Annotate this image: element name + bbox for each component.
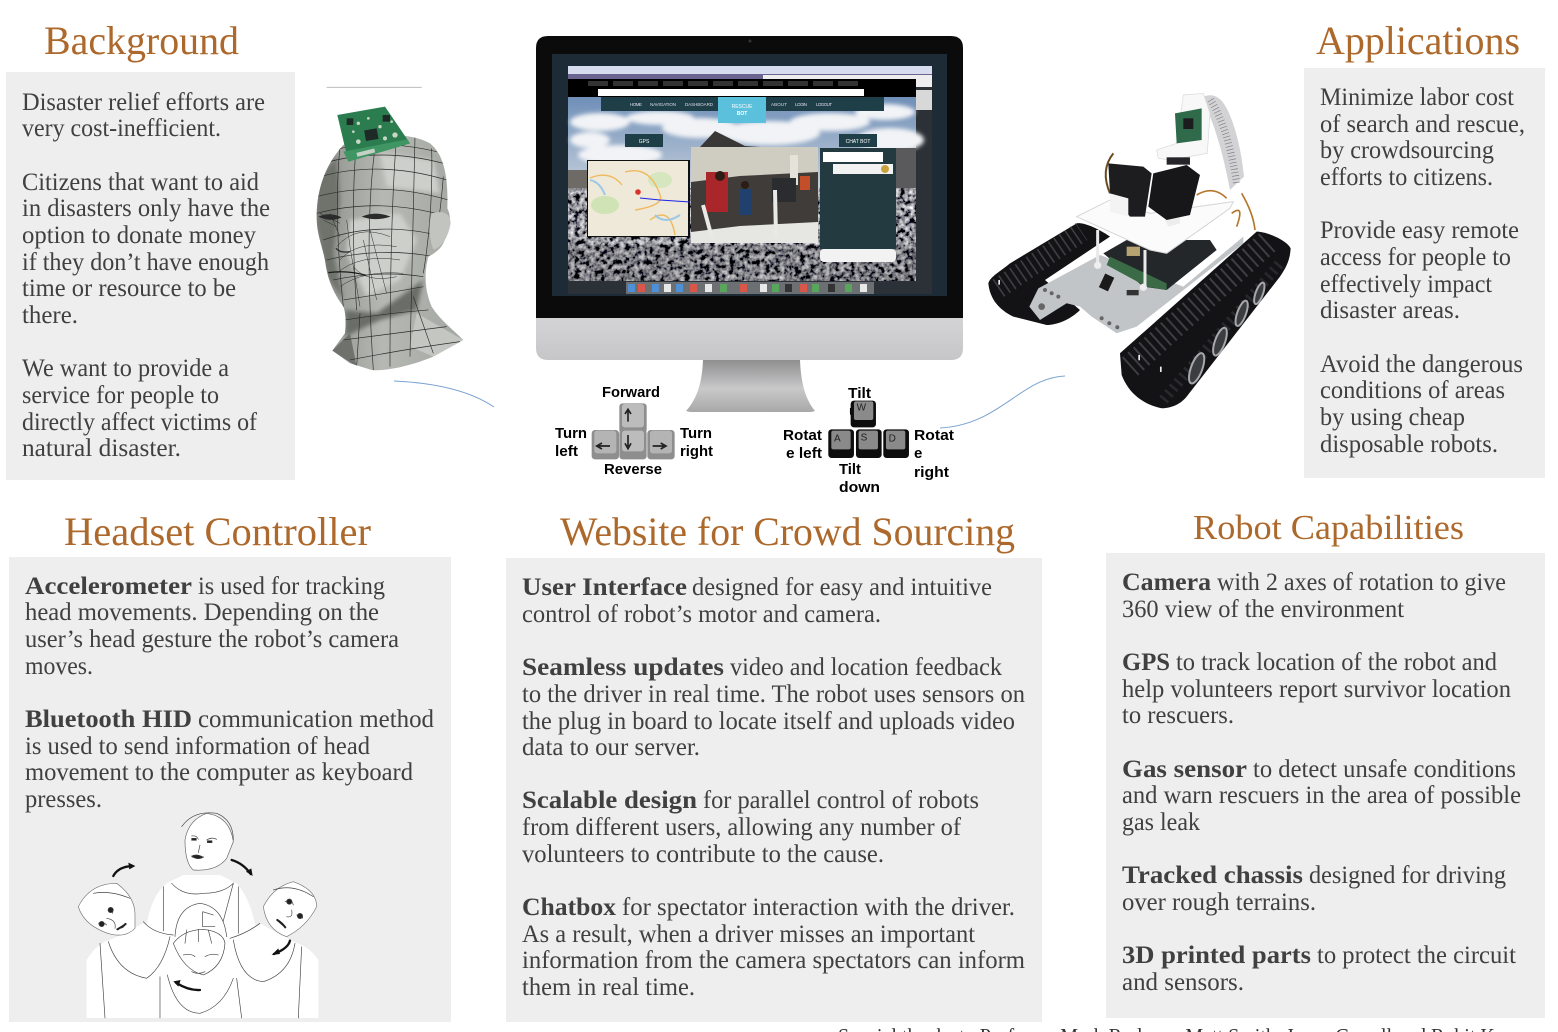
panel: Website for Crowd Sourcing (506, 558, 1042, 1022)
panel: Robot Capabilities: Tracked chassis (1122, 862, 1303, 889)
panel: Applications: access for people to (1320, 244, 1511, 271)
panel: Website for Crowd Sourcing: designed for easy and intuitive (692, 574, 992, 601)
panel: Robot Capabilities: designed for driving (1309, 862, 1506, 889)
rear track (988, 223, 1110, 325)
wires (1197, 191, 1255, 230)
illustration: head tilt gestures (78, 813, 318, 1018)
chassis plate (1029, 237, 1243, 333)
panel: Headset Controller: presses. (25, 786, 102, 813)
heading: Headset Controller: Headset Controller (64, 509, 371, 554)
website screenshot: NAVIGATION (650, 102, 676, 107)
panel: Website for Crowd Sourcing: video and location feedback (730, 654, 1002, 681)
panel: Website for Crowd Sourcing: User Interface (522, 574, 687, 601)
panel: Headset Controller: is used to send information of head (25, 733, 370, 760)
panel: Background: if they don’t have enough (22, 249, 269, 276)
panel: Robot Capabilities: 3D printed parts (1122, 942, 1311, 969)
keys: arrow keys and labels: Reverse (604, 461, 662, 478)
panel: Applications (1304, 68, 1545, 478)
panel: Robot Capabilities: help volunteers report survivor location (1122, 676, 1511, 703)
panel: Headset Controller: communication method (198, 706, 434, 733)
panel: Website for Crowd Sourcing: the plug in board to locate itself and uploads video (522, 708, 1015, 735)
panel: Robot Capabilities: GPS (1122, 649, 1170, 676)
monitor bezel (536, 36, 963, 318)
right figure (230, 923, 318, 1018)
panel: Website for Crowd Sourcing: for spectator interaction with the driver. (622, 894, 1015, 921)
panel: Applications: disaster areas. (1320, 297, 1460, 324)
panel: Headset Controller: movement to the computer as keyboard (25, 759, 413, 786)
keys: WASD keys and labels: right (914, 464, 949, 481)
keys: arrow keys and labels: Forward (602, 384, 660, 401)
keys: arrow keys and labels (555, 384, 713, 478)
panel: Website for Crowd Sourcing: information from the camera spectators can inform (522, 947, 1026, 974)
gesture arrows (113, 860, 290, 990)
posts (1098, 230, 1145, 287)
top figure (143, 875, 260, 1018)
panel: Background: Citizens that want to aid (22, 169, 259, 196)
panel: Robot Capabilities: and sensors. (1122, 969, 1244, 996)
panel: Robot Capabilities: Camera (1122, 569, 1212, 596)
panel: Applications: Minimize labor cost (1320, 84, 1514, 111)
keys: WASD keys and labels: Tilt (839, 461, 861, 478)
website screenshot (568, 66, 932, 294)
panel: Headset Controller: head movements. Depending on the (25, 599, 379, 626)
keys: WASD keys and labels: D (889, 433, 896, 444)
keys: arrow keys and labels: Turn (680, 425, 712, 442)
website screenshot: DASHBOARD (685, 102, 714, 107)
panel: Robot Capabilities: with 2 axes of rotation to give (1217, 569, 1506, 596)
keys: WASD keys and labels: Rotat (914, 427, 954, 444)
panel: Applications: Provide easy remote (1320, 217, 1519, 244)
panel: Background: option to donate money (22, 222, 256, 249)
panel: Background: there. (22, 302, 78, 329)
panel: Robot Capabilities: gas leak (1122, 809, 1200, 836)
panel: Website for Crowd Sourcing: volunteers to contribute to the cause. (522, 841, 884, 868)
panel: Website for Crowd Sourcing: for parallel control of robots (703, 787, 979, 814)
keys: WASD keys and labels: e left (786, 445, 822, 462)
panel: Website for Crowd Sourcing: data to our server. (522, 734, 700, 761)
panel: Robot Capabilities: to protect the circuit (1317, 942, 1516, 969)
panel: Website for Crowd Sourcing: Seamless updates (522, 654, 724, 681)
panel: Background: time or resource to be (22, 275, 236, 302)
panel: Applications: effectively impact (1320, 271, 1492, 298)
camera mount (1157, 93, 1210, 160)
keys: WASD keys and labels: up (849, 403, 867, 420)
heading: Robot Capabilities: Robot Capabilities (1193, 508, 1464, 547)
panel: Headset Controller: Accelerometer (25, 573, 192, 600)
keys: WASD keys and labels: e (914, 445, 922, 462)
panel: Applications: efforts to citizens. (1320, 164, 1493, 191)
front track (1120, 232, 1291, 408)
panel: Headset Controller: is used for tracking (198, 573, 385, 600)
panel: Robot Capabilities: and warn rescuers in the area of possible (1122, 782, 1521, 809)
keys: WASD keys and labels: A (834, 433, 841, 444)
website screenshot: LOGIN (795, 102, 807, 107)
monitor stand (686, 360, 815, 412)
panel: Background (6, 72, 295, 480)
panel: Applications: of search and rescue, (1320, 111, 1525, 138)
left figure (87, 923, 175, 1018)
panel: Robot Capabilities: 360 view of the environment (1122, 596, 1404, 623)
website screenshot: BOT (737, 111, 747, 117)
keys: WASD keys and labels: Tilt (848, 385, 871, 402)
panel: Applications: Avoid the dangerous (1320, 351, 1523, 378)
arrow: head to website (394, 381, 494, 407)
keys: arrow keys and labels: Turn (555, 425, 587, 442)
panel: Applications: conditions of areas (1320, 377, 1505, 404)
panel: Background: natural disaster. (22, 435, 181, 462)
panel: Background: We want to provide a (22, 355, 229, 382)
panel: Headset Controller: moves. (25, 653, 93, 680)
heading: Applications: Applications (1316, 18, 1520, 63)
keys: WASD keys and labels: S (861, 433, 868, 444)
panel: Background: very cost-inefficient. (22, 115, 221, 142)
panel: Background: in disasters only have the (22, 195, 270, 222)
arrow: keyboard to robot (940, 376, 1065, 428)
panel: Applications: disposable robots. (1320, 431, 1498, 458)
panel: Website for Crowd Sourcing: Chatbox (522, 894, 617, 921)
heading: Background: Background (44, 18, 239, 63)
panel: Website for Crowd Sourcing: from different users, allowing any number of (522, 814, 962, 841)
website screenshot: HOME (630, 102, 642, 107)
panel: Background: service for people to (22, 382, 219, 409)
heading: Website for Crowd Sourcing: Website for Crowd Sourcing (560, 509, 1015, 554)
keys: WASD keys and labels: W (857, 403, 867, 414)
chat box (820, 148, 896, 249)
ribbon cable (1203, 95, 1244, 190)
panel: Headset Controller (9, 557, 451, 1022)
panel: Applications: by using cheap (1320, 404, 1465, 431)
map (587, 160, 690, 237)
panel: Robot Capabilities: to track location of the robot and (1176, 649, 1497, 676)
panel: Website for Crowd Sourcing: As a result, when a driver misses an important (522, 921, 975, 948)
website screenshot: ABOUT (771, 102, 787, 107)
keys: arrow keys and labels: left (555, 443, 578, 460)
panel: Robot Capabilities: to rescuers. (1122, 702, 1234, 729)
keys: WASD keys and labels: Rotat (783, 427, 822, 444)
video feed (691, 147, 818, 243)
keys: arrow keys and labels: right (680, 443, 713, 460)
front figure (145, 972, 253, 1018)
panel: Background: Disaster relief efforts are (22, 89, 265, 116)
dock (626, 282, 874, 294)
website screenshot: CHAT BOT (846, 139, 870, 145)
panel: Headset Controller: Bluetooth HID (25, 706, 192, 733)
panel: Website for Crowd Sourcing: them in real time. (522, 974, 695, 1001)
panel: Website for Crowd Sourcing: control of robot’s motor and camera. (522, 601, 881, 628)
electronics stack (1103, 240, 1217, 290)
keys: WASD keys and labels (783, 385, 954, 496)
icon: desktop monitor showing website (536, 36, 963, 412)
keys: WASD keys and labels: down (839, 479, 880, 496)
panel: Website for Crowd Sourcing: Scalable design (522, 787, 697, 814)
panel: Robot Capabilities (1106, 553, 1545, 1018)
servos (1108, 163, 1152, 217)
website screenshot: RESCUE (732, 104, 753, 110)
monitor chin (536, 318, 963, 360)
panel: Website for Crowd Sourcing: to the driver in real time. The robot uses sensors on (522, 681, 1025, 708)
website screenshot: GPS (639, 139, 650, 145)
website screenshot: LOGOUT (816, 102, 832, 107)
icon: tracked robot (988, 93, 1291, 408)
panel: Robot Capabilities: to detect unsafe conditions (1253, 756, 1516, 783)
panel: Robot Capabilities: over rough terrains. (1122, 889, 1316, 916)
panel: Background: directly affect victims of (22, 409, 258, 436)
camera board (1175, 108, 1202, 143)
top plate (1077, 200, 1233, 253)
panel: Robot Capabilities: Gas sensor (1122, 756, 1247, 783)
panel: Applications: by crowdsourcing (1320, 137, 1494, 164)
icon: wireframe head with circuit board (317, 87, 463, 370)
panel: Headset Controller: user’s head gesture the robot’s camera (25, 626, 399, 653)
